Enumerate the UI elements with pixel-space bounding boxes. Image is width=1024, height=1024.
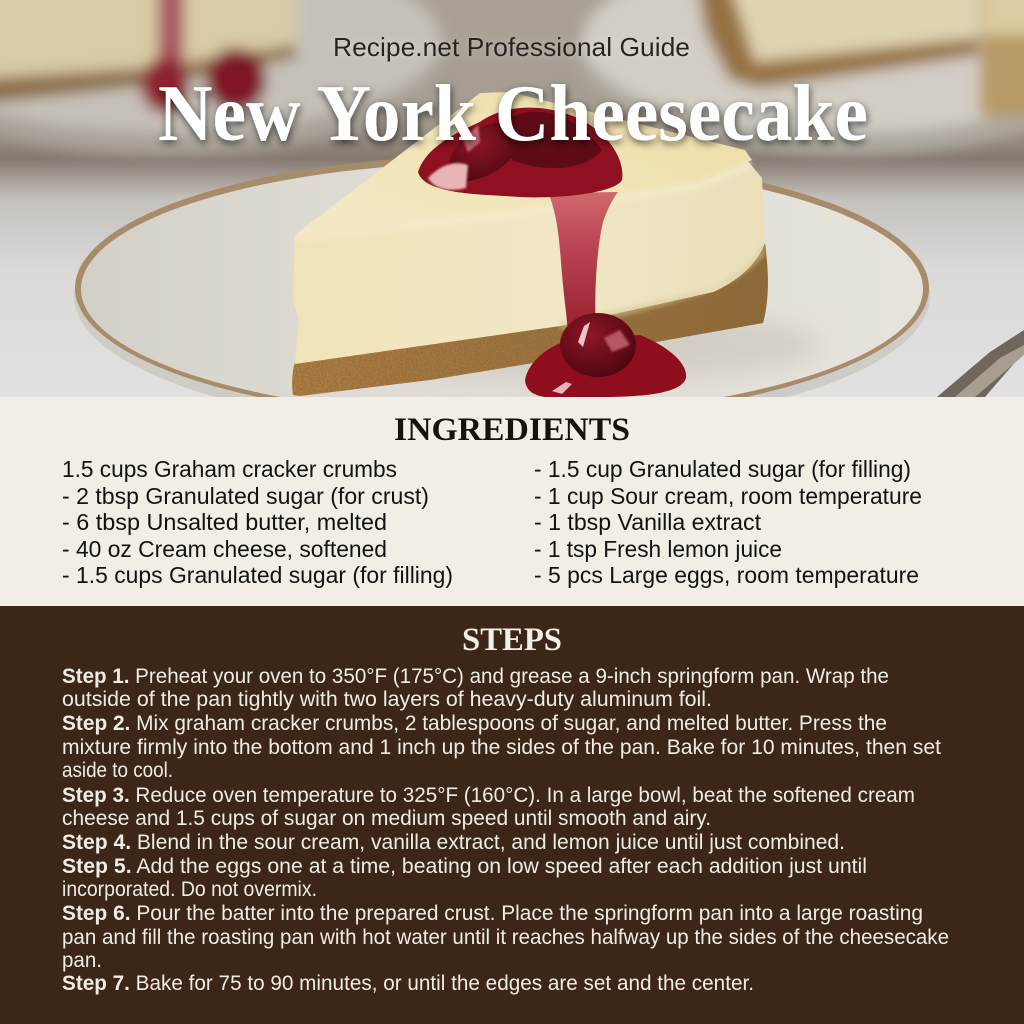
steps text: cheese and 1.5 cups of sugar on medium speed until smooth and airy.	[62, 807, 711, 830]
title: New York Cheesecake	[158, 70, 868, 158]
panel: steps	[0, 606, 1024, 1024]
steps text: Step 5. Add the eggs one at a time, beating on low speed after each addition just until	[62, 855, 867, 878]
ingredients list: left column: - 2 tbsp Granulated sugar (for crust)	[62, 483, 429, 509]
ingredients list: right column: - 1.5 cup Granulated sugar (for filling)	[534, 456, 911, 482]
ingredients list: left column	[62, 456, 453, 588]
fork handle	[937, 330, 1024, 397]
steps text: Step 6. Pour the batter into the prepared crust. Place the springform pan into a large roasting	[62, 902, 923, 925]
ingredients list: right column: - 5 pcs Large eggs, room temperature	[534, 562, 919, 588]
subtitle: Recipe.net Professional Guide	[333, 32, 690, 62]
steps text: pan.	[62, 949, 102, 972]
steps text: aside to cool.	[62, 759, 173, 782]
ingredients list: right column: - 1 cup Sour cream, room temperature	[534, 483, 922, 509]
cheesecake slice	[292, 92, 768, 396]
plate	[74, 155, 930, 432]
steps text: Step 3. Reduce oven temperature to 325°F (160°C). In a large bowl, beat the softened cream	[62, 784, 915, 807]
cherry sauce on top	[418, 108, 622, 197]
steps text: outside of the pan tightly with two layers of heavy-duty aluminum foil.	[62, 688, 712, 711]
steps text: pan and fill the roasting pan with hot water until it reaches halfway up the sides of the cheesecake	[62, 926, 949, 949]
ingredients heading: INGREDIENTS	[394, 412, 630, 448]
steps text: Step 1. Preheat your oven to 350°F (175°C) and grease a 9-inch springform pan. Wrap the	[62, 665, 889, 688]
cherry sauce drip	[548, 192, 618, 332]
panel: ingredients	[0, 397, 1024, 606]
left background plate	[0, 0, 445, 155]
steps text	[62, 665, 949, 995]
ingredients list: left column: - 40 oz Cream cheese, softened	[62, 536, 387, 562]
cherry sauce pool and cherry	[525, 313, 686, 397]
ingredients list: left column: 1.5 cups Graham cracker crumbs	[62, 456, 397, 482]
hero photo: cheesecake slice on a plate	[0, 0, 1024, 432]
ingredients list: left column: - 6 tbsp Unsalted butter, melted	[62, 509, 387, 535]
steps text: Step 7. Bake for 75 to 90 minutes, or until the edges are set and the center.	[62, 972, 754, 995]
ingredients list: right column: - 1 tsp Fresh lemon juice	[534, 536, 782, 562]
ingredients list: right column	[534, 456, 922, 588]
steps text: mixture firmly into the bottom and 1 inch up the sides of the pan. Bake for 10 minutes, then set	[62, 736, 941, 759]
ingredients list: right column: - 1 tbsp Vanilla extract	[534, 509, 761, 535]
ingredients list: left column: - 1.5 cups Granulated sugar (for filling)	[62, 562, 453, 588]
right background plate	[578, 0, 1024, 155]
steps text: incorporated. Do not overmix.	[62, 878, 317, 901]
steps heading: STEPS	[462, 622, 562, 658]
steps text: Step 4. Blend in the sour cream, vanilla extract, and lemon juice until just combined.	[62, 831, 845, 854]
steps text: Step 2. Mix graham cracker crumbs, 2 tablespoons of sugar, and melted butter. Press the	[62, 712, 887, 735]
blurred background scene	[0, 0, 1024, 155]
